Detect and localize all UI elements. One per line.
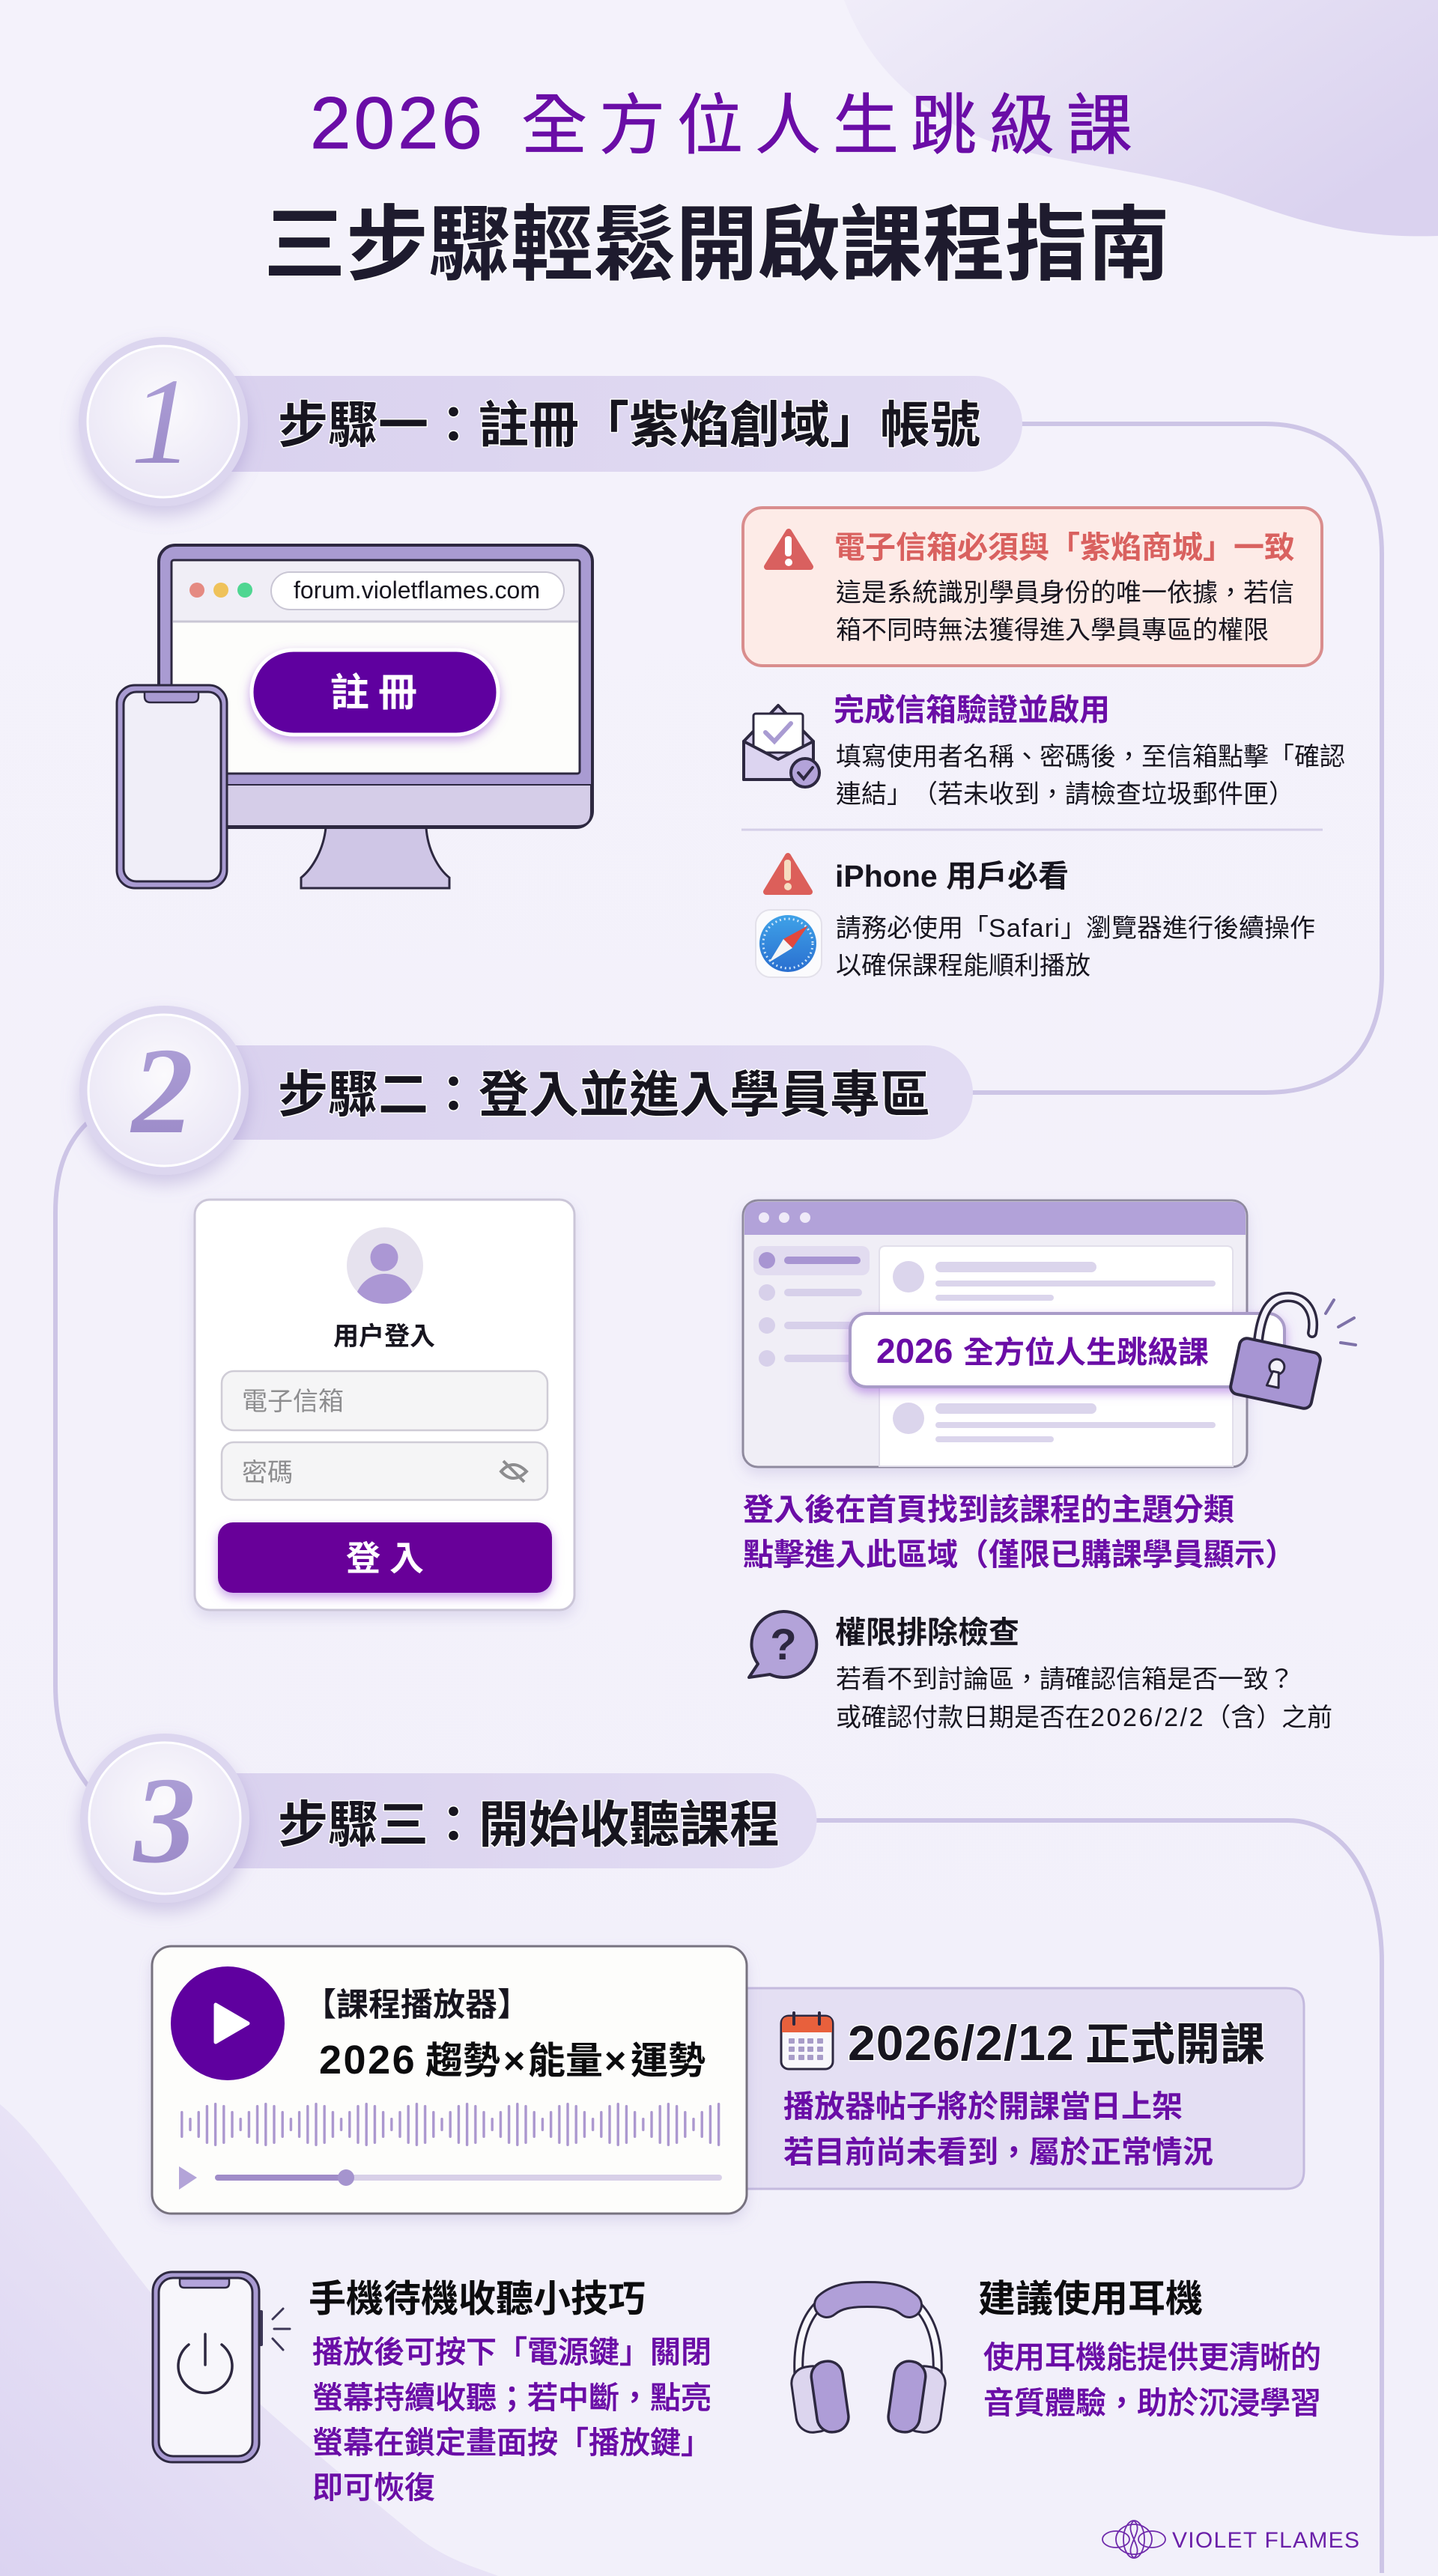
icon: question bubble: ?	[770, 1620, 797, 1669]
login heading: 用户登入	[333, 1322, 435, 1351]
purple instruction text: 登入後在首頁找到該課程的主題分類	[743, 1492, 1234, 1527]
block body: 請務必使用「	[836, 914, 989, 943]
player title: 2026	[319, 2038, 416, 2083]
player title: ×	[604, 2040, 626, 2082]
icon: play button	[171, 1966, 285, 2080]
step 2 pill	[163, 1045, 973, 1140]
login card	[195, 1200, 574, 1610]
password field: 密碼	[242, 1459, 293, 1487]
step 1 pill	[163, 376, 1022, 472]
player title: 能量	[528, 2040, 603, 2082]
block body: Safari」瀏覽器進行後續操作	[989, 914, 1315, 943]
monitor body	[159, 545, 592, 827]
tip: headphones	[789, 2278, 1321, 2434]
launch date heading: 正式開課	[1085, 2020, 1265, 2070]
tip heading: 手機待機收聽小技巧	[309, 2278, 646, 2320]
step 3 badge	[80, 1734, 249, 1903]
block body: 或確認付款日期是否在	[836, 1704, 1090, 1732]
callout body: ，若信	[1218, 572, 1294, 609]
course banner: 2026	[876, 1331, 953, 1370]
waveform	[178, 2097, 722, 2152]
tip body: 音質體驗	[983, 2386, 1106, 2420]
block: iPhone users	[756, 856, 1315, 980]
block body: 連結」（若未收到	[836, 780, 1040, 809]
title line 1: 全方位人生跳級課	[521, 88, 1144, 162]
step 3 header	[80, 1734, 816, 1903]
step 2 heading: 步驟二：登入並進入學員專區	[278, 1067, 930, 1123]
block body: 2026/2/2（含）之前	[1090, 1704, 1332, 1732]
tip: phone standby	[153, 2272, 712, 2505]
block: email verification	[744, 693, 1345, 810]
step 1 badge	[79, 337, 248, 506]
icon: open padlock	[1229, 1297, 1356, 1410]
course banner: 全方位人生跳級課	[963, 1335, 1209, 1370]
forum posts	[879, 1246, 1233, 1466]
block body: 若看不到討論區	[836, 1665, 1014, 1694]
block body: 填寫使用者名稱、密碼後	[836, 743, 1116, 771]
step 3 badge: 3	[133, 1752, 195, 1889]
phone	[117, 685, 227, 888]
register button: 註冊	[330, 672, 426, 715]
callout: email must match	[743, 508, 1322, 666]
tip body: 使用耳機能提供更清晰的	[983, 2340, 1321, 2375]
launch note: 若目前尚未看到	[783, 2135, 998, 2169]
forum window illustration	[743, 1200, 1356, 1467]
icon: avatar	[347, 1227, 423, 1304]
player title: 趨勢	[425, 2040, 500, 2082]
tip heading: 建議使用耳機	[978, 2278, 1203, 2320]
block heading: 權限排除檢查	[835, 1615, 1019, 1650]
tip body: ，助於沉浸學習	[1106, 2378, 1321, 2422]
title	[264, 82, 1170, 291]
step 3 pill	[165, 1773, 816, 1868]
step 2 header	[79, 1006, 973, 1175]
wordmark: VIOLET FLAMES	[1172, 2528, 1359, 2553]
icon: logo flower	[1102, 2521, 1165, 2558]
connector: step 1 to step 2	[966, 424, 1382, 1093]
url bar: forum.violetflames.com	[294, 577, 540, 604]
launch date heading: 2026/2/12	[848, 2015, 1075, 2071]
block heading: 完成信箱驗證並啟用	[834, 693, 1110, 727]
login button: 登入	[346, 1539, 433, 1578]
tip body: 即可恢復	[312, 2470, 435, 2505]
logo: Violet Flames	[1102, 2521, 1359, 2558]
icon: headphones	[789, 2288, 947, 2434]
info panel: launch date	[741, 1988, 1304, 2189]
icon: calendar	[781, 2013, 833, 2069]
step 1 header	[79, 337, 1022, 506]
password field	[222, 1442, 547, 1500]
player title: ×	[503, 2040, 525, 2082]
monitor stand	[301, 827, 449, 888]
forum sidebar	[753, 1246, 870, 1367]
icon: warning triangle	[767, 532, 810, 567]
block body: ，請確認信箱是否一致？	[1014, 1659, 1294, 1695]
icon: phone power	[153, 2272, 290, 2462]
block: permission check	[749, 1611, 1332, 1732]
audio player card	[152, 1946, 747, 2214]
player title: 運勢	[631, 2040, 706, 2082]
icon: Safari	[756, 910, 822, 977]
block body: 以確保課程能順利播放	[836, 952, 1090, 980]
tip body: 播放後可按下「電源鍵」關閉	[312, 2335, 712, 2369]
purple instruction text: 點擊進入此區域（僅限已購課學員顯示）	[743, 1537, 1296, 1572]
tip body: ，點亮	[619, 2372, 712, 2417]
step 1 badge: 1	[131, 353, 192, 490]
email field: 電子信箱	[242, 1388, 344, 1416]
callout body: 這是系統識別學員身份的唯一依據	[836, 579, 1218, 607]
title line 2: 三步驟輕鬆開啟課程指南	[264, 199, 1170, 291]
step 3 heading: 步驟三：開始收聽課程	[278, 1797, 780, 1853]
icon: envelope with check	[744, 705, 819, 787]
launch note: 播放器帖子將於開課當日上架	[783, 2089, 1183, 2124]
step 1 heading: 步驟一：註冊「紫焰創域」帳號	[278, 398, 980, 454]
block heading: iPhone 用戶必看	[835, 859, 1069, 893]
connector: step 2 to step 3	[55, 1123, 90, 1788]
tip body: 螢幕在鎖定畫面按「播放鍵」	[312, 2425, 712, 2460]
illustration: desktop and phone	[117, 545, 592, 888]
block body: ，請檢查垃圾郵件匣）	[1040, 774, 1294, 810]
icon: question bubble	[749, 1611, 816, 1677]
title line 1: 2026	[310, 82, 485, 164]
url bar	[271, 572, 564, 610]
step 2 badge: 2	[130, 1022, 193, 1159]
browser screen	[172, 560, 580, 774]
register button	[252, 650, 498, 735]
course banner	[850, 1313, 1284, 1387]
icon: warning triangle	[766, 856, 810, 892]
callout heading: 電子信箱必須與「紫焰商城」一致	[834, 530, 1295, 565]
connector: step 3 to footer	[813, 1820, 1382, 2573]
launch note: ，屬於正常情況	[998, 2127, 1213, 2172]
progress bar	[179, 2166, 722, 2190]
block body: ，至信箱點擊「確認	[1116, 736, 1345, 773]
login button	[218, 1522, 552, 1593]
player label: 【課程播放器】	[304, 1987, 530, 2023]
email field	[222, 1371, 547, 1430]
callout body: 箱不同時無法獲得進入學員專區的權限	[836, 616, 1269, 645]
tip body: 螢幕持續收聽；若中斷	[312, 2381, 619, 2415]
step 2 badge	[79, 1006, 249, 1175]
